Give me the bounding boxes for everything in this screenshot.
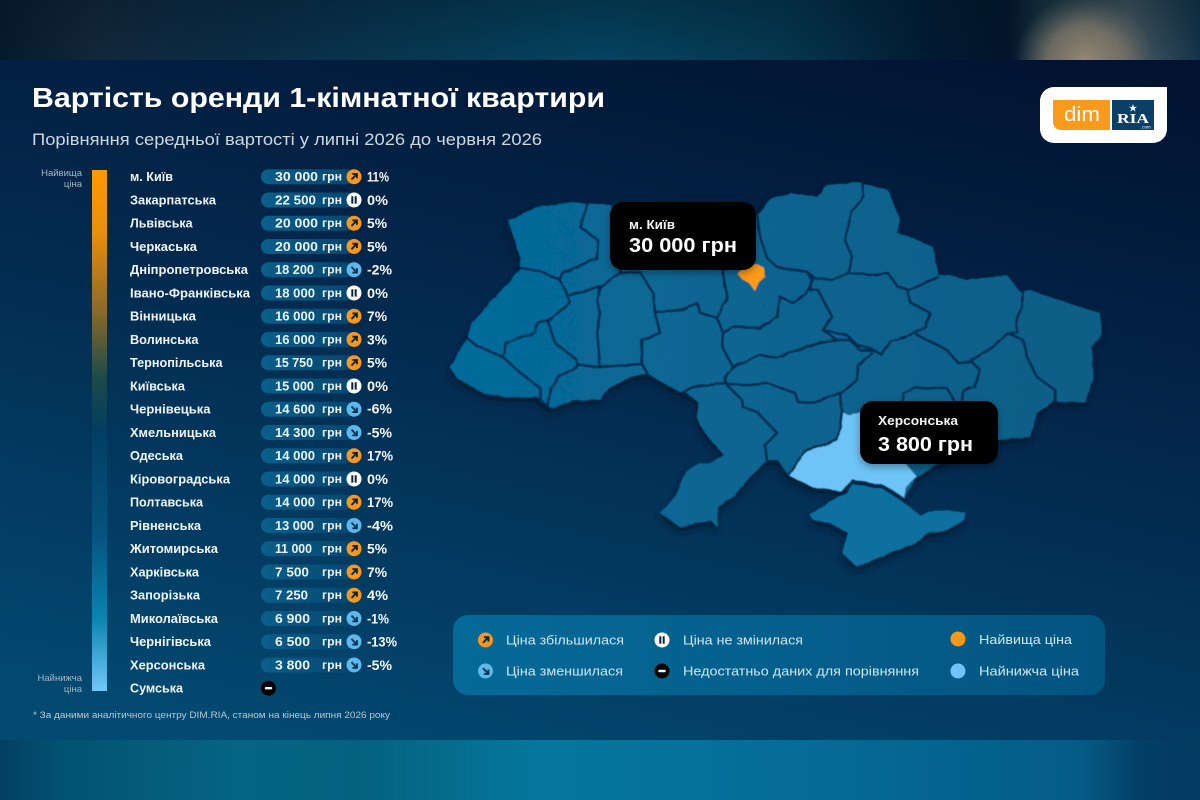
- row: Кіровоградська: грн: [322, 474, 342, 486]
- row: Вінницька: грн: [322, 311, 342, 323]
- legend: lowest price: Найнижча ціна: [979, 664, 1080, 678]
- row: Запорізька: Запорізька: [130, 588, 201, 603]
- row: Одеська: 14 000: [275, 448, 315, 463]
- row: м. Київ: 11%: [367, 169, 389, 185]
- row: Черкаська: 20 000: [275, 239, 318, 254]
- legend: lowest price: [950, 664, 1080, 678]
- callout: Kyiv: м. Київ: [629, 217, 675, 232]
- row: Вінницька: [130, 308, 388, 324]
- legend: price increased: Ціна збільшилася: [506, 632, 624, 648]
- row: Херсонська: грн: [322, 660, 342, 672]
- row: Полтавська: [130, 494, 394, 510]
- row: Запорізька: грн: [322, 590, 342, 602]
- row: Харківська: Харківська: [130, 564, 200, 579]
- row: Волинська: 16 000: [275, 332, 315, 347]
- row: Одеська: грн: [322, 451, 342, 463]
- region: Kyiv city (highest price): [737, 264, 765, 291]
- price scale gradient bar: [38, 168, 107, 695]
- row: Дніпропетровська: [130, 262, 393, 278]
- row: Миколаївська: -1%: [367, 610, 389, 626]
- row: Київська: 15 000: [275, 378, 314, 393]
- price scale gradient bar: ціна: [64, 684, 83, 695]
- row: Волинська: грн: [322, 334, 342, 346]
- row: Житомирська: [129, 541, 388, 557]
- row: Житомирська: грн: [322, 544, 342, 556]
- row: Дніпропетровська: -2%: [367, 262, 393, 278]
- row: Чернівецька: -6%: [367, 401, 393, 417]
- row: Закарпатська: [130, 192, 389, 208]
- row: Чернігівська: грн: [322, 637, 342, 649]
- row: Житомирська: 5%: [367, 541, 388, 557]
- title: Вартість оренди 1-кімнатної квартири: [32, 82, 605, 113]
- row: Полтавська: 14 000: [275, 495, 315, 510]
- row: Чернігівська: 6 500: [275, 634, 310, 649]
- row: Сумська: Сумська: [130, 681, 184, 696]
- mainland regions: [450, 182, 1102, 527]
- row: Рівненська: 13 000: [275, 518, 314, 533]
- row: Львівська: грн: [322, 218, 342, 230]
- row: Миколаївська: Миколаївська: [130, 611, 219, 626]
- row: Сумська: [130, 681, 276, 696]
- row: Івано-Франківська: грн: [322, 288, 342, 300]
- row: Полтавська: Полтавська: [130, 495, 204, 510]
- row: Чернівецька: 14 600: [275, 402, 315, 417]
- row: Рівненська: -4%: [367, 517, 394, 533]
- row: Київська: 0%: [367, 378, 389, 394]
- row: Одеська: [130, 448, 394, 464]
- row: Одеська: Одеська: [130, 448, 184, 463]
- row: Рівненська: [130, 517, 394, 533]
- row: Черкаська: грн: [322, 241, 342, 253]
- row: Кіровоградська: Кіровоградська: [130, 471, 231, 486]
- ranking table of regions: [129, 169, 398, 696]
- row: Полтавська: 17%: [367, 494, 394, 510]
- row: Чернівецька: Чернівецька: [130, 402, 211, 417]
- row: Херсонська: 3 800: [275, 657, 310, 672]
- row: Кіровоградська: 0%: [367, 471, 389, 487]
- price scale gradient bar: ціна: [64, 179, 83, 190]
- row: Хмельницька: -5%: [367, 424, 393, 440]
- callout: Kherson: [860, 401, 998, 464]
- row: Хмельницька: Хмельницька: [130, 425, 217, 440]
- row: Чернігівська: -13%: [367, 634, 398, 650]
- row: Вінницька: Вінницька: [130, 309, 197, 324]
- row: Київська: [130, 378, 389, 394]
- row: Івано-Франківська: Івано-Франківська: [130, 285, 251, 300]
- row: Миколаївська: [130, 610, 389, 626]
- callout: Kherson: 3 800 грн: [878, 434, 973, 456]
- row: Вінницька: 16 000: [275, 309, 315, 324]
- row: Дніпропетровська: грн: [322, 265, 342, 277]
- row: Волинська: [130, 331, 388, 347]
- row: Харківська: 7%: [367, 564, 388, 580]
- row: Львівська: 20 000: [275, 216, 318, 231]
- row: Херсонська: [130, 657, 393, 673]
- row: Тернопільська: 15 750: [275, 355, 313, 370]
- legend: price unchanged: Ціна не змінилася: [683, 632, 803, 648]
- legend: [453, 615, 1105, 695]
- price scale gradient bar: Найнижча: [38, 673, 83, 684]
- row: Львівська: 5%: [367, 215, 388, 231]
- row: Закарпатська: 22 500: [275, 192, 316, 207]
- region: Crimea: [810, 484, 965, 567]
- callout: Kyiv: 30 000 грн: [629, 235, 737, 257]
- price scale gradient bar: Найвища: [41, 168, 83, 179]
- row: Тернопільська: 5%: [367, 355, 388, 371]
- row: Львівська: [130, 215, 388, 231]
- row: Хмельницька: грн: [322, 427, 342, 439]
- row: Черкаська: 5%: [367, 238, 388, 254]
- row: Закарпатська: 0%: [367, 192, 389, 208]
- row: Житомирська: Житомирська: [129, 541, 219, 556]
- row: Тернопільська: [130, 355, 388, 371]
- callout: Kyiv: [610, 202, 756, 270]
- row: Київська: Київська: [130, 378, 186, 393]
- row: Чернігівська: [130, 634, 398, 650]
- legend: price decreased: Ціна зменшилася: [506, 664, 623, 678]
- legend: not enough data: Недостатньо даних для порівняння: [683, 664, 919, 678]
- row: м. Київ: [130, 169, 389, 185]
- row: Чернігівська: Чернігівська: [130, 634, 212, 649]
- row: Волинська: 3%: [367, 331, 388, 347]
- callout: Kherson: Херсонська: [878, 413, 959, 428]
- row: Херсонська: -5%: [367, 657, 393, 673]
- row: Чернівецька: грн: [322, 404, 342, 416]
- row: Івано-Франківська: 18 000: [275, 285, 315, 300]
- row: Дніпропетровська: 18 200: [275, 262, 314, 277]
- footnote: * За даними аналітичного центру DIM.RIA, станом на кінець липня 2026 року: [33, 710, 390, 721]
- subtitle: Порівняння середньої вартості у липні 2026 до червня 2026: [32, 130, 542, 149]
- logo: dim RIA: dim: [1064, 104, 1100, 126]
- row: Хмельницька: 14 300: [275, 425, 315, 440]
- row: м. Київ: 30 000: [275, 169, 318, 184]
- row: Закарпатська: грн: [322, 195, 342, 207]
- row: Харківська: [130, 564, 388, 580]
- row: Львівська: Львівська: [130, 216, 193, 231]
- row: Черкаська: Черкаська: [130, 239, 198, 254]
- legend: highest price: [950, 632, 1073, 647]
- row: м. Київ: грн: [322, 172, 342, 184]
- row: Київська: грн: [322, 381, 342, 393]
- row: Дніпропетровська: Дніпропетровська: [130, 262, 249, 277]
- row: Тернопільська: грн: [322, 358, 342, 370]
- row: Чернівецька: [130, 401, 393, 417]
- row: Запорізька: 4%: [367, 587, 389, 603]
- row: Запорізька: 7 250: [275, 588, 308, 603]
- row: Тернопільська: Тернопільська: [130, 355, 223, 370]
- legend: highest price: Найвища ціна: [979, 632, 1073, 647]
- logo: dim RIA: RIA: [1117, 112, 1150, 127]
- row: Івано-Франківська: 0%: [367, 285, 389, 301]
- row: Херсонська: Херсонська: [130, 657, 206, 672]
- row: Хмельницька: [130, 424, 393, 440]
- row: Волинська: Волинська: [130, 332, 199, 347]
- row: Черкаська: [130, 238, 388, 254]
- row: Рівненська: грн: [322, 520, 342, 532]
- row: Кіровоградська: [130, 471, 389, 487]
- row: Рівненська: Рівненська: [130, 518, 202, 533]
- row: Одеська: 17%: [367, 448, 394, 464]
- row: Полтавська: грн: [322, 497, 342, 509]
- row: Кіровоградська: 14 000: [275, 471, 315, 486]
- row: Житомирська: 11 000: [275, 541, 312, 556]
- row: Вінницька: 7%: [367, 308, 388, 324]
- row: Запорізька: [130, 587, 389, 603]
- row: Харківська: грн: [322, 567, 342, 579]
- region borders: [467, 182, 1055, 499]
- region: Kherson (lowest price): [788, 412, 917, 498]
- row: Миколаївська: грн: [322, 613, 342, 625]
- row: Закарпатська: Закарпатська: [130, 192, 217, 207]
- row: м. Київ: м. Київ: [130, 169, 173, 184]
- row: Харківська: 7 500: [275, 564, 309, 579]
- row: Івано-Франківська: [130, 285, 389, 301]
- logo: dim RIA: [1040, 87, 1167, 143]
- map of Ukraine: [450, 182, 1102, 567]
- row: Миколаївська: 6 900: [275, 611, 310, 626]
- logo: dim RIA: .com: [1141, 124, 1151, 130]
